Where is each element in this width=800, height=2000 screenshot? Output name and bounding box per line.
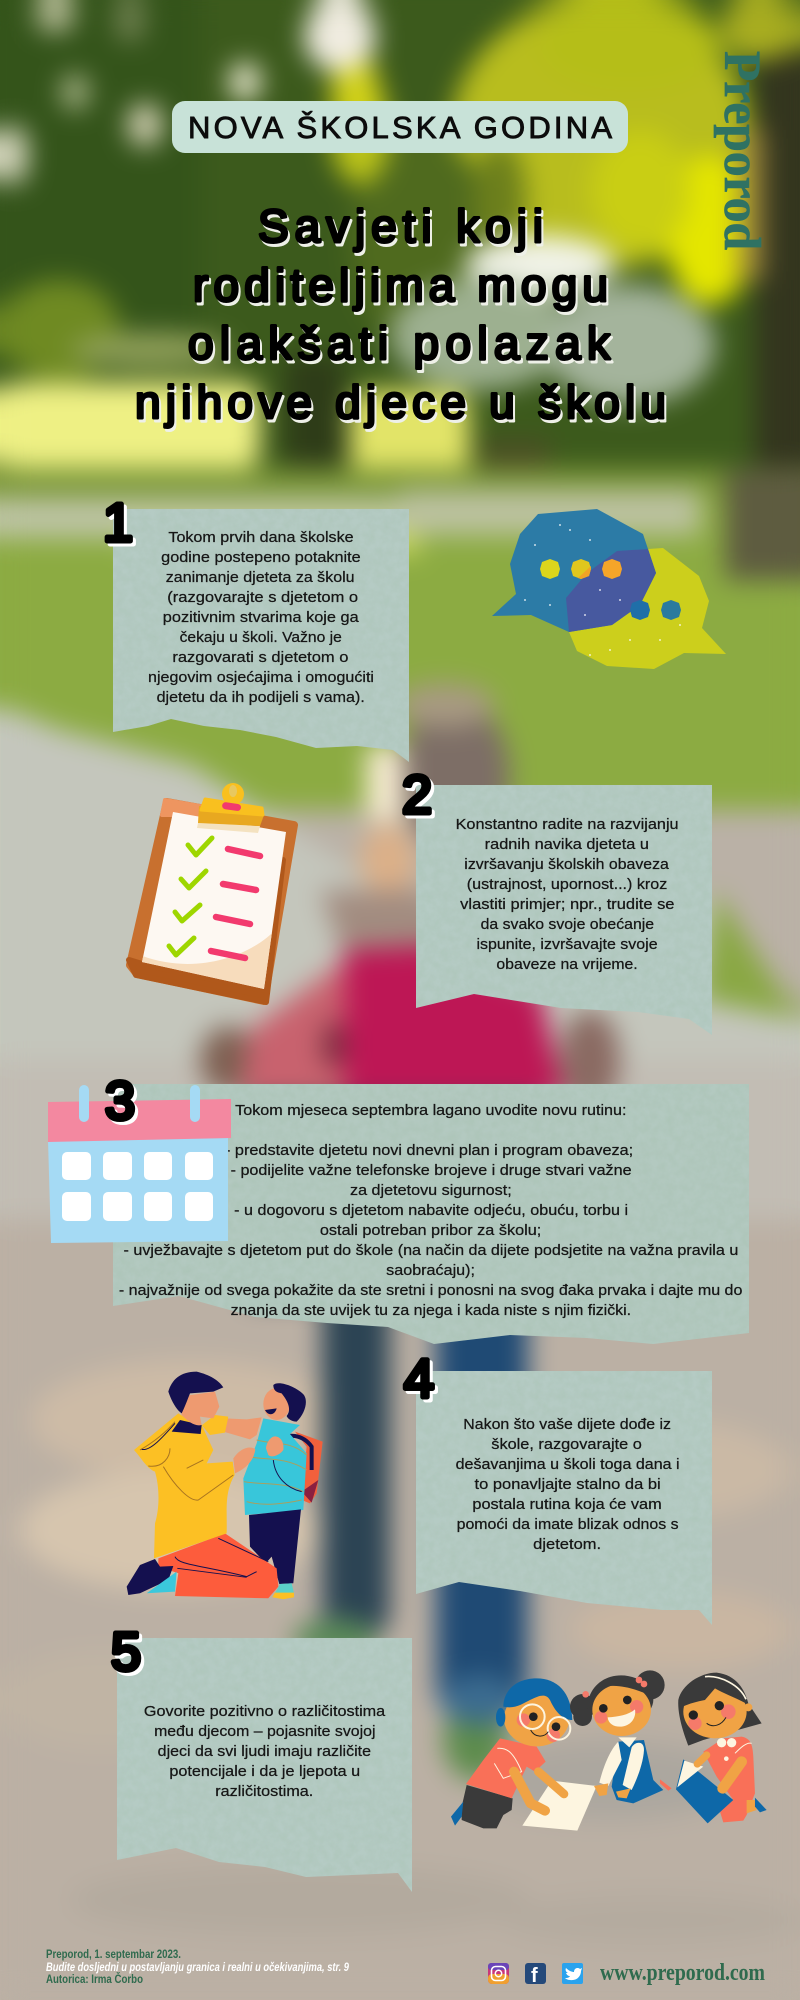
number 4: 4	[407, 1352, 437, 1412]
panel 2 text: vlastiti primjer; npr., trudite se	[460, 896, 674, 913]
title: njihove djece u školu	[137, 379, 668, 431]
panel 3	[113, 1084, 749, 1344]
number 3: 3	[108, 1074, 138, 1134]
footer credits: Autorica: Irma Čorbo	[46, 1971, 143, 1986]
panel 3 text: - uvježbavajte s djetetom put do škole (na način da dijete podsjetite na važna pravila u	[124, 1242, 738, 1259]
panel 5 text: potencijale i da je ljepota u	[169, 1763, 360, 1780]
parent's head	[180, 1392, 219, 1425]
panel 2 text: ispunite, izvršavajte svoje	[476, 936, 658, 953]
panel 3 text: za djetetovu sigurnost;	[350, 1182, 512, 1199]
icon: facebook: f	[531, 1965, 538, 1987]
first child's trousers	[462, 1785, 513, 1828]
panel 1 text: zanimanje djeteta za školu	[166, 569, 355, 586]
vertical Preporod logo: Preporod	[713, 51, 770, 250]
panel 4 text: to ponavljajte stalno da bi	[474, 1476, 661, 1493]
child's raised hand	[266, 1436, 284, 1456]
panel 3 text: saobraćaju);	[386, 1262, 475, 1279]
panel 1 text: njegovim osjećajima i omogućiti	[148, 669, 374, 686]
panel 5 text: Govorite pozitivno o različitostima	[144, 1703, 386, 1720]
number 2: 2	[402, 765, 432, 825]
panel 2 text: Konstantno radite na razvijanju	[456, 816, 679, 833]
pill heading: Nova školska godina	[172, 101, 628, 153]
panel 5 text	[144, 1703, 386, 1800]
website address: www.preporod.com	[600, 1960, 765, 1986]
third child's dress	[703, 1737, 755, 1822]
icon: clipboard	[129, 783, 294, 1002]
number 1: 1	[106, 496, 136, 556]
second child's head	[592, 1684, 651, 1736]
child's shoe	[275, 1583, 294, 1593]
second child's sleeves	[599, 1742, 622, 1786]
panel 3 text: - u dogovoru s djetetom nabavite odjeću, obuću, torbu i	[234, 1202, 628, 1219]
second child's dress	[612, 1740, 663, 1803]
panel 4 text: djetetom.	[533, 1536, 601, 1553]
panel 3 text: Tokom mjeseca septembra lagano uvodite novu rutinu:	[235, 1102, 626, 1119]
panel 2 text: izvršavanju školskih obaveza	[464, 856, 670, 873]
number 5: 5	[114, 1625, 144, 1685]
panel 1 text: razgovarati s djetetom o	[172, 649, 348, 666]
number 1: 1	[103, 493, 133, 553]
third child's book	[676, 1759, 733, 1823]
title	[135, 200, 668, 431]
footer credits: Preporod, 1. septembar 2023.	[46, 1947, 181, 1961]
child's jacket	[243, 1418, 307, 1515]
panel 4 text	[456, 1416, 680, 1553]
title: olakšati polazak	[188, 317, 611, 369]
icon: calendar	[48, 1085, 231, 1243]
panel 4 text: dešavanjima u školi toga dana i	[456, 1456, 680, 1473]
panel 1 text: (razgovarajte s djetetom o	[167, 589, 358, 606]
panel 1	[113, 509, 409, 762]
panel 1 text: čekaju u školi. Važno je	[180, 629, 342, 646]
first child's head	[504, 1690, 569, 1746]
panel 3 text	[119, 1102, 742, 1319]
parent's arm	[223, 1417, 262, 1439]
panel 1 text: Tokom prvih dana školske	[168, 529, 354, 546]
icon: speech bubbles	[492, 509, 726, 669]
panel 5	[117, 1638, 412, 1892]
panel 3 text: ostali potreban pribor za školu;	[320, 1222, 541, 1239]
icon: instagram	[488, 1963, 509, 1984]
illustration: parent and child	[127, 1372, 323, 1599]
panel 4 text: Nakon što vaše dijete dođe iz	[463, 1416, 671, 1433]
panel 1 text: pozitivnim stvarima koje ga	[163, 609, 359, 626]
panel 3 text: znanja da ste uvijek tu za njega i kada niste s njim fizički.	[231, 1302, 631, 1319]
number 3: 3	[105, 1071, 135, 1131]
third child's head	[683, 1685, 747, 1738]
parent's jacket	[134, 1413, 235, 1558]
number 4: 4	[404, 1349, 434, 1409]
pill heading: Nova školska godina: NOVA ŠKOLSKA GODINA	[188, 110, 612, 145]
panel 2 text: obaveze na vrijeme.	[496, 956, 638, 973]
parent's trousers	[158, 1533, 278, 1598]
panel 2 text	[456, 816, 679, 973]
parent's shoe	[127, 1559, 173, 1595]
panel 5 text: različitostima.	[215, 1783, 313, 1800]
parent's collar	[172, 1420, 202, 1434]
panel 1 text: djetetu da ih podijeli s vama).	[157, 689, 365, 706]
title: olakšati polazak	[190, 320, 613, 372]
parent's hand	[233, 1447, 255, 1473]
panel 3 text: - najvažnije od svega pokažite da ste sretni i ponosni na svog đaka prvaka i dajte mu do	[119, 1282, 742, 1299]
first child's arms	[514, 1772, 564, 1811]
number 5: 5	[111, 1622, 141, 1682]
panel 4	[416, 1371, 712, 1625]
backpack	[295, 1432, 323, 1503]
first child's shirt	[466, 1738, 546, 1798]
panel 2 text: (ustrajnost, upornost...) kroz	[467, 876, 667, 893]
icon: twitter	[562, 1963, 583, 1984]
third child's arms	[697, 1755, 742, 1788]
title: roditeljima mogu	[195, 262, 610, 314]
footer credits	[46, 1947, 349, 1986]
child's trousers	[249, 1509, 301, 1584]
panel 2 text: radnih navika djeteta u	[485, 836, 649, 853]
panel 5 text: djeci da svi ljudi imaju različite	[158, 1743, 371, 1760]
title: Savjeti koji	[258, 200, 543, 252]
panel 4 text: postala rutina koja će vam	[472, 1496, 662, 1513]
panel 3 text: - podijelite važne telefonske brojeve i druge stvari važne	[231, 1162, 632, 1179]
title: njihove djece u školu	[135, 376, 666, 428]
panel 1 text: godine postepeno potaknite	[161, 549, 361, 566]
second child's hair	[570, 1694, 595, 1719]
panel 4 text: pomoći da imate blizak odnos s	[457, 1516, 679, 1533]
title: roditeljima mogu	[193, 259, 608, 311]
panel 3 text: - predstavite djetetu novi dnevni plan i program obaveza;	[225, 1142, 633, 1159]
third child's foot	[747, 1800, 757, 1813]
panel 2	[416, 785, 712, 1035]
child's head	[263, 1388, 290, 1420]
title: Savjeti koji	[260, 203, 545, 255]
panel 5 text: među djecom – pojasnite svojoj	[154, 1723, 376, 1740]
footer credits: Budite dosljedni u postavljanju granica i realni u očekivanjima, str. 9	[46, 1960, 349, 1974]
number 2: 2	[405, 768, 435, 828]
panel 4 text: škole, razgovarajte o	[491, 1436, 642, 1453]
first child's shoe	[451, 1802, 463, 1826]
sheet of paper	[522, 1781, 597, 1831]
panel 1 text	[148, 529, 374, 706]
panel 2 text: da svako svoje obećanje	[481, 916, 654, 933]
icon: facebook	[525, 1963, 546, 1987]
illustration: three children	[451, 1670, 767, 1831]
third child's hair	[678, 1673, 762, 1746]
